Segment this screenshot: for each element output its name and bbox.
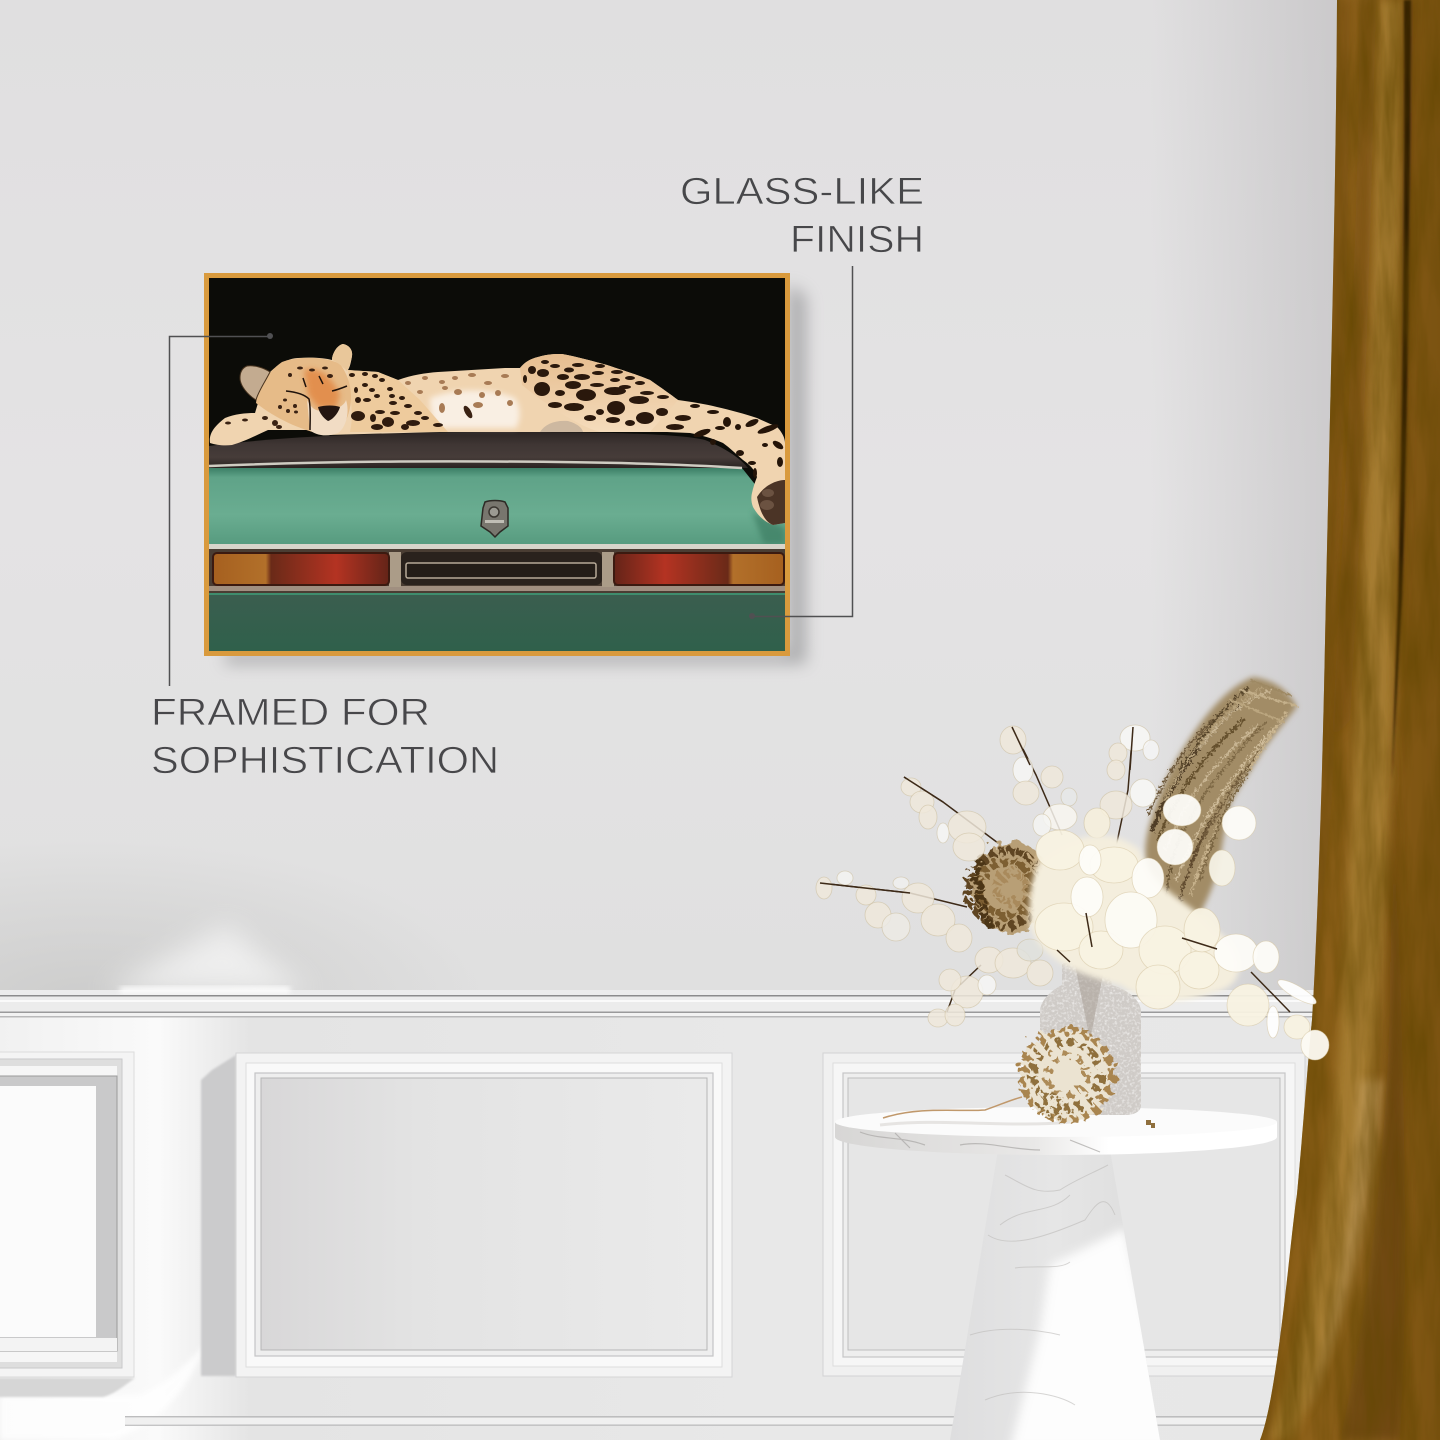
cheetah tear mark and eyes: [286, 376, 347, 430]
shoulder spots: [349, 372, 443, 430]
marble veins: [970, 1165, 1115, 1405]
centre plate: [401, 552, 602, 585]
cheetah face: [256, 358, 351, 434]
rear foot on roof: [540, 421, 583, 432]
table edge veins: [860, 1132, 1100, 1152]
tail light left: [213, 553, 389, 585]
wall panel: left: [0, 1052, 135, 1397]
frame shadow: [225, 284, 806, 664]
wall panel: right: [823, 1053, 1305, 1376]
left ear: [240, 366, 270, 400]
table top shading: [880, 1122, 1070, 1125]
cheetah orange blaze: [304, 369, 340, 408]
upper stem accents: [820, 727, 1290, 1012]
wall panel: centre: [201, 1053, 732, 1377]
haunch spots: [523, 360, 691, 430]
dark flank mark: [464, 406, 472, 418]
lower panel: [209, 593, 785, 651]
soft top roof: [209, 432, 748, 468]
pillar left: [389, 552, 401, 587]
trunk right shadow: [752, 512, 785, 544]
tail light right: [614, 553, 784, 585]
table edge: [835, 1119, 1277, 1155]
pedestal table: [835, 1107, 1277, 1440]
car trunk: [209, 468, 785, 546]
cheetah muzzle: [307, 400, 348, 435]
painting: [209, 278, 785, 651]
lit part of table base: [1010, 1228, 1180, 1440]
sunlight patch on wall: [105, 925, 310, 992]
right ear: [332, 344, 352, 371]
wainscot lower wall: [0, 987, 1320, 1440]
callout label: SOPHISTICATION: [151, 740, 499, 782]
hind leg spots: [690, 404, 785, 478]
haunch: [520, 354, 678, 432]
hind paw: [757, 480, 785, 525]
cheetah silhouette: [210, 344, 785, 525]
bouquet centre mass: [1029, 836, 1239, 1001]
leader line: [170, 333, 273, 686]
callout: framed for sophistication: [151, 333, 499, 782]
pale body spots: [405, 373, 513, 413]
chrome strip: [209, 461, 742, 468]
vase and dried flowers: [816, 677, 1329, 1128]
cheetah: [210, 344, 785, 525]
pampas plume: [1145, 677, 1297, 916]
dried flower ball on table: [1021, 1029, 1113, 1121]
emblem: [481, 500, 508, 537]
cheetah nose: [318, 406, 340, 421]
wall background: [0, 0, 1440, 1000]
white belly: [430, 390, 520, 428]
pillar right: [602, 552, 614, 587]
glass vase: [1040, 963, 1141, 1115]
callout label: GLASS-LIKE: [680, 171, 924, 213]
callout label: FRAMED FOR: [151, 692, 430, 734]
callout label: [680, 171, 924, 261]
translucent silver-dollar leaves: [816, 725, 1159, 1027]
table base: [950, 1150, 1160, 1440]
curtain: [1255, 0, 1440, 1440]
painting background: [209, 278, 785, 484]
front leg spots and face spots: [225, 366, 333, 429]
fallen petals: [1146, 1120, 1155, 1128]
framed artwork: [204, 273, 806, 664]
shoulder: [348, 370, 448, 432]
leader line: [749, 266, 852, 619]
stems: [820, 727, 1133, 1012]
brown hydrangea: [968, 842, 1052, 934]
callout label: FINISH: [790, 219, 924, 261]
gold frame: [204, 273, 790, 656]
bright leaves in bouquet centre: [1035, 794, 1329, 1060]
bumper chrome top: [209, 544, 785, 549]
callout label: [151, 692, 499, 782]
callout: glass-like finish: [680, 171, 924, 619]
bumper chrome bottom: [209, 586, 785, 591]
dried stem on table: [883, 1097, 1022, 1118]
bumper: [209, 549, 785, 593]
table top surface: [835, 1107, 1277, 1137]
lower panel top edge: [209, 593, 785, 595]
